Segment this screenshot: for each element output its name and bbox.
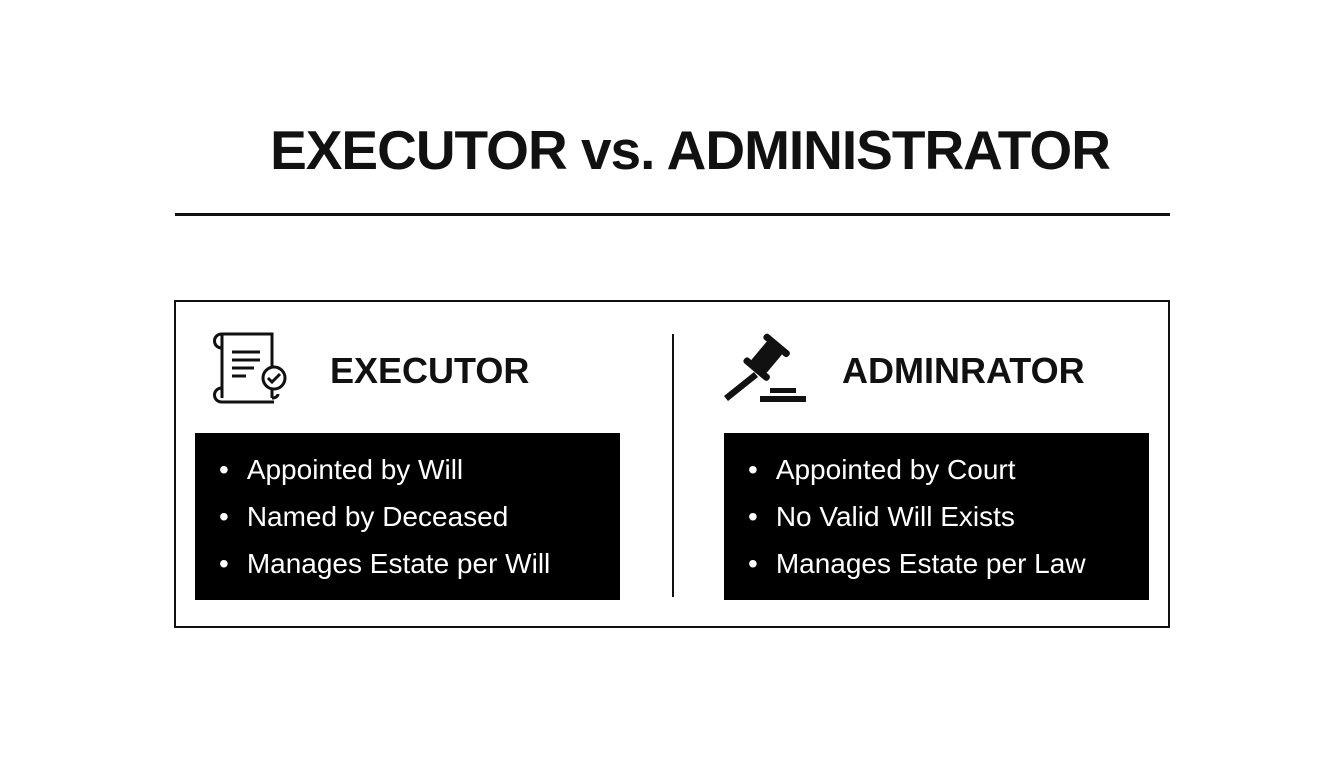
list box: administrator — [724, 433, 1149, 600]
list box: executor: Manages Estate per Will — [247, 548, 550, 579]
heading: administrator: ADMINRATOR — [842, 350, 1085, 391]
panel: comparison — [174, 300, 1170, 628]
icon: scroll with check — [213, 332, 286, 404]
list box: executor: Named by Deceased — [247, 501, 508, 532]
list box: administrator: No Valid Will Exists — [776, 501, 1015, 532]
list box: administrator: Appointed by Court — [776, 454, 1016, 485]
list box: executor: Appointed by Will — [247, 454, 463, 485]
title: EXECUTOR vs. ADMINISTRATOR — [270, 119, 1110, 181]
divider — [672, 334, 674, 597]
list box: administrator: Manages Estate per Law — [776, 548, 1086, 579]
heading: executor: EXECUTOR — [330, 350, 529, 391]
icon: gavel — [724, 334, 806, 402]
title underline — [175, 213, 1170, 216]
list box: executor — [195, 433, 620, 600]
